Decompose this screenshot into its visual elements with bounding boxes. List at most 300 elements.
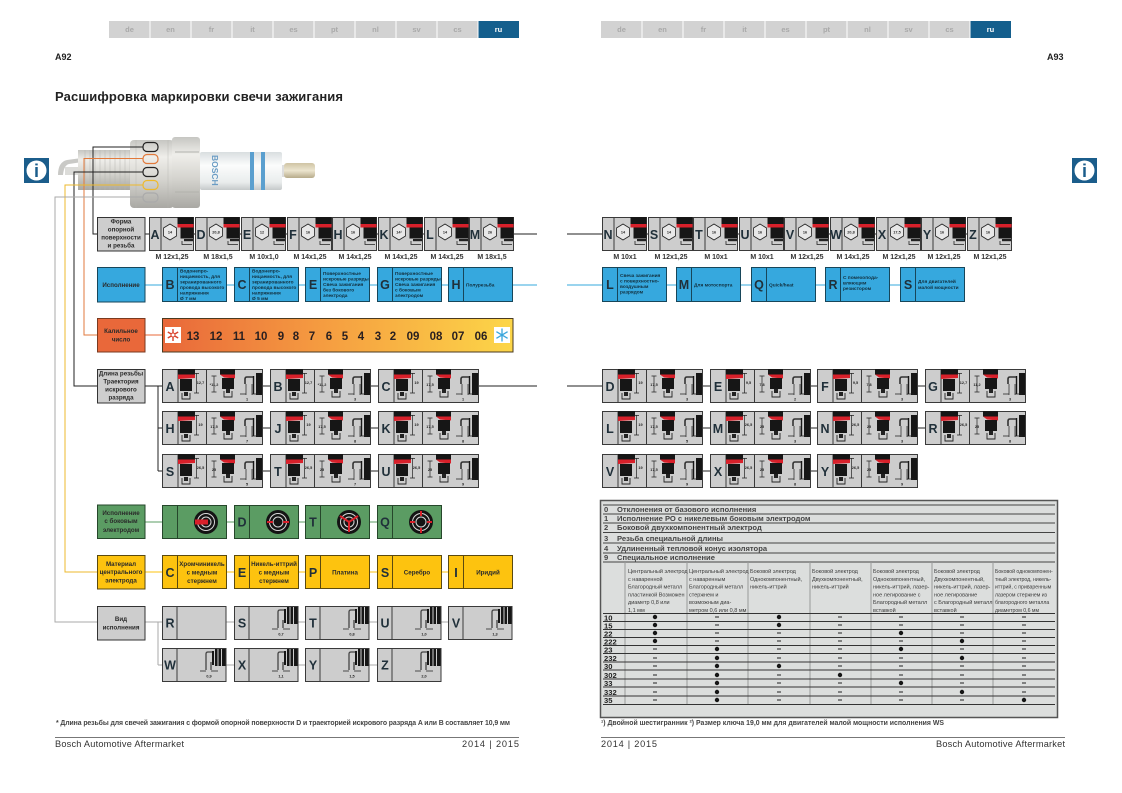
- thread length cells: right page: 26,5: [745, 423, 752, 427]
- material cells: S: [381, 566, 389, 580]
- thread length cells: right page: 11,2: [973, 383, 981, 387]
- material cells: C: [165, 566, 175, 580]
- connector lines between cells: [145, 234, 1026, 665]
- language tabs: left page: [109, 21, 519, 38]
- thread cells: left page: M: [470, 228, 480, 242]
- row 7 label: version: исполнения: [103, 624, 140, 632]
- row 4 label: thread length and spark path: Траектория: [103, 378, 139, 386]
- design cells: left page: H: [451, 278, 461, 292]
- thread length cells: right page: N: [820, 422, 830, 436]
- thread cells: left page: K: [379, 228, 389, 242]
- thread length cells: left page: T: [274, 465, 282, 479]
- column headers: метром 0,6 или 0,8 мм: [689, 608, 747, 614]
- heat range bar: 13: [187, 331, 199, 343]
- thread length cells: left page: 25: [320, 468, 324, 472]
- thread length cells: left page: 19: [306, 423, 311, 427]
- code descriptions: Удлиненный тепловой конус изолятора: [617, 544, 768, 553]
- design cells: left page: провода высокого: [252, 286, 296, 291]
- row codes: 302: [604, 671, 617, 680]
- row 4 label: thread length and spark path: искрового: [105, 386, 137, 394]
- footer left: Bosch Automotive Aftermarket: [55, 739, 184, 749]
- column headers: возможным диа-: [689, 600, 731, 606]
- thread length cells: right page: [602, 369, 1026, 488]
- thread length cells: left page: 1: [246, 398, 248, 402]
- row codes: 30: [604, 662, 612, 671]
- language tabs: left page: en: [166, 25, 175, 34]
- row codes: 10: [604, 614, 612, 622]
- thread length cells: right page: 26,5: [960, 423, 967, 427]
- design cells: left page: провода высокого: [180, 286, 224, 291]
- row codes: 23: [604, 646, 612, 654]
- thread length cells: left page: 5: [246, 482, 248, 486]
- thread length cells: left page: 25: [212, 468, 216, 472]
- design cells: right page: вляющим: [843, 282, 867, 286]
- column headers: никель-иттрий: [750, 584, 787, 591]
- column headers: иттрий, с приваренным: [995, 584, 1052, 591]
- thread cells: left page: M 14x1,25: [293, 254, 327, 261]
- thread length cells: right page: 19: [638, 381, 643, 385]
- design cells: left page: искровые разряды: [395, 278, 441, 282]
- design cells: left page: Поверхностные: [323, 271, 361, 277]
- language tabs: right page: sv: [904, 25, 913, 34]
- design cells: left page: B: [165, 278, 175, 292]
- thread length cells: left page: 7: [246, 440, 248, 444]
- column headers: Боковой электрод: [934, 568, 981, 575]
- electrode gap cells: 1,3: [492, 632, 498, 636]
- language tabs: right page: [601, 21, 1011, 38]
- thread cells: right page: S: [650, 228, 658, 242]
- thread cells: right page: M 12x1,25: [654, 254, 688, 261]
- thread length cells: left page: 19: [414, 423, 419, 427]
- thread cells: right page: Y: [923, 228, 932, 242]
- thread cells: left page: M 10x1,0: [249, 254, 279, 261]
- thread cells: right page: M 12x1,25: [973, 254, 1007, 261]
- column headers: Двухкомпонентный,: [934, 576, 985, 583]
- column headers: Благородный металл: [689, 584, 743, 591]
- thread cells: left page: L: [426, 228, 434, 242]
- row 6 label: centre electrode material: Материал: [106, 561, 136, 568]
- thread cells: right page: T: [695, 228, 703, 242]
- material cells: Серебро: [404, 570, 430, 576]
- thread length cells: left page: 1: [462, 398, 464, 402]
- thread length cells: right page: L: [606, 422, 614, 436]
- thread length cells: left page: S: [166, 465, 174, 479]
- thread length cells: right page: X: [714, 465, 723, 479]
- column headers: никель-иттрий, лазер-: [873, 584, 930, 591]
- thread cells: right page: 16: [940, 230, 944, 234]
- spark plug illustration: [58, 137, 315, 208]
- thread length cells: right page: 9: [901, 482, 903, 486]
- design cells: left page: электрода: [323, 294, 348, 299]
- heat range bar: 12: [210, 331, 222, 343]
- thread cells: right page: M 10x1: [613, 254, 637, 261]
- thread cells: right page: M 10x1: [750, 254, 774, 261]
- row 1 label: seat shape and thread: опорной: [108, 226, 134, 234]
- design cells: left page: ницаемость, для: [252, 275, 292, 280]
- design cells: right page: Для двигателей: [918, 278, 956, 285]
- electrode gap cells: X: [238, 658, 247, 672]
- design cells: right page: с поверхностно-: [620, 280, 660, 284]
- electrode gap cells: S: [238, 616, 246, 630]
- design cells: left page: Водонепро-: [252, 268, 281, 274]
- column headers: диаметром 0,6 мм: [995, 608, 1039, 614]
- design cells: left page: без бокового: [323, 286, 354, 294]
- heat range bar: 11: [233, 331, 246, 343]
- thread length cells: right page: 3: [686, 398, 688, 402]
- electrode gap cells: R: [165, 616, 175, 630]
- heat range bar: 6: [326, 331, 332, 343]
- thread cells: left page: M 14x1,25: [430, 254, 464, 261]
- thread cells: right page: 14: [621, 230, 626, 234]
- language tabs: left page: cs: [453, 25, 462, 34]
- column headers: Боковой электрод: [750, 568, 797, 575]
- language tabs: right page: ru: [987, 25, 995, 34]
- column headers: Благородный металл: [873, 599, 927, 606]
- row codes: 332: [604, 688, 617, 697]
- icon: cold snowflake: [494, 327, 510, 343]
- leader lines from plug to rows: [55, 142, 158, 622]
- column headers: 1,1 мм: [628, 608, 645, 614]
- thread length cells: right page: 2: [794, 398, 796, 402]
- thread cells: left page: 16: [306, 230, 310, 234]
- row 1 label: seat shape and thread: и резьба: [108, 242, 135, 250]
- thread cells: right page: 16: [986, 230, 990, 234]
- thread length cells: right page: 5: [686, 440, 688, 444]
- thread length cells: left page: 17,5: [210, 425, 218, 429]
- column headers: с наваренной: [628, 576, 663, 583]
- row 6 label: centre electrode material: центрального: [100, 569, 143, 576]
- thread length cells: left page: *11,2: [318, 383, 326, 387]
- row codes: 232: [604, 654, 617, 663]
- heat range bar: 9: [278, 331, 284, 343]
- row 4 label: thread length and spark path: Длина резьбы: [99, 370, 143, 378]
- column headers: Центральный электрод: [628, 568, 688, 575]
- column headers: Боковой однокомпонен-: [995, 568, 1053, 575]
- thread cells: left page: 12: [260, 230, 264, 234]
- design cells: left page: напряжения: [180, 292, 209, 296]
- design cells: left page: экранированного: [252, 280, 294, 286]
- thread length cells: right page: 17,5: [650, 425, 658, 429]
- footnote left: * Длина резьбы для свечей зажигания с формой опорной поверхности D и траекторией искрового разряда A или B составляет 10,9 мм: [56, 719, 510, 727]
- row 4 label: thread length and spark path: [98, 370, 145, 403]
- column headers: никель-иттрий, лазер-: [934, 584, 991, 591]
- icon: info right: i: [1082, 161, 1087, 181]
- thread length cells: right page: M: [713, 422, 723, 436]
- row codes: 22: [604, 630, 612, 638]
- design cells: left page: Водонепро-: [180, 268, 209, 274]
- thread cells: left page: M 18x1,5: [477, 254, 507, 261]
- thread length cells: left page: 12,7: [197, 381, 204, 385]
- design cells: right page: Свеча зажигания: [620, 273, 661, 279]
- heat range bar: 7: [309, 331, 315, 343]
- thread length cells: right page: 17,5: [650, 383, 658, 387]
- heat range bar: 09: [407, 331, 419, 343]
- side electrode cells: D: [237, 516, 247, 530]
- code descriptions: Специальное исполнение: [617, 553, 715, 562]
- footer right: Bosch Automotive Aftermarket: [936, 739, 1065, 749]
- thread length cells: left page: 3: [354, 398, 356, 402]
- code descriptions: 3: [604, 534, 608, 543]
- column headers: тный электрод, никель-: [995, 576, 1052, 583]
- row codes: 35: [604, 696, 613, 705]
- design cells: left page: E: [309, 278, 317, 292]
- language tabs: right page: it: [742, 25, 747, 34]
- thread cells: right page: 16: [758, 230, 762, 234]
- thread length cells: left page: 8: [462, 440, 464, 444]
- language tabs: right page: es: [781, 25, 790, 34]
- thread length cells: left page: 12,7: [305, 381, 312, 385]
- side electrode cells: T: [309, 516, 317, 530]
- thread cells: right page: M 12x1,25: [927, 254, 961, 261]
- dashes: not applicable: [653, 617, 1026, 700]
- thread length cells: left page: A: [165, 380, 175, 394]
- column headers: [628, 568, 1053, 614]
- design cells: left page: Полурезьба: [466, 282, 495, 288]
- design cells: right page: M: [679, 278, 689, 292]
- column headers: стержнем и: [689, 592, 718, 598]
- electrode gap cells: 1,0: [421, 632, 427, 636]
- thread length cells: left page: 8: [354, 440, 356, 444]
- row codes: [604, 614, 617, 705]
- page number A92: A92: [55, 52, 72, 62]
- language tabs: right page: cs: [945, 25, 954, 34]
- footer right: 2014 | 2015: [601, 739, 657, 749]
- row 7 label: version: Вид: [115, 616, 127, 623]
- row 5 label: side electrode: с боковым: [104, 518, 138, 525]
- thread length cells: left page: 9: [462, 482, 464, 486]
- thread length cells: right page: 3: [901, 440, 903, 444]
- material cells: Иридий: [476, 570, 500, 576]
- thread length cells: right page: 12,7: [960, 381, 967, 385]
- dots: applicable combinations: [653, 615, 1026, 702]
- thread length cells: right page: E: [714, 380, 722, 394]
- row 6 label: centre electrode material: [98, 556, 145, 589]
- language tabs: left page: pt: [331, 25, 339, 34]
- electrode gap cells: 0,9: [206, 674, 212, 678]
- footer left: [55, 738, 519, 749]
- thread length cells: left page: 17,5: [426, 383, 434, 387]
- thread cells: left page: 16: [351, 230, 355, 234]
- thread length cells: left page: J: [275, 422, 282, 436]
- thread cells: left page: M 14x1,25: [384, 254, 418, 261]
- electrode gap cells: 0,7: [278, 632, 284, 636]
- column headers: ное легирование с: [873, 592, 921, 598]
- row 3 label: heat range: [98, 318, 145, 352]
- code descriptions: 0: [604, 505, 608, 514]
- thread cells: right page: M 12x1,25: [882, 254, 916, 261]
- thread cells: left page: 14: [168, 230, 173, 234]
- material cells: E: [238, 566, 246, 580]
- heat range bar: 2: [390, 331, 396, 343]
- thread cells: left page: F: [289, 228, 297, 242]
- design cells: left page: напряжения: [252, 292, 281, 296]
- icon: hot star: [165, 327, 181, 343]
- thread length cells: right page: 3: [794, 440, 796, 444]
- thread length cells: right page: 9,5: [853, 381, 858, 385]
- column headers: вставкой: [873, 607, 896, 614]
- thread length cells: left page: K: [381, 422, 391, 436]
- thread cells: right page: Z: [969, 228, 977, 242]
- design cells: left page: электродом: [395, 294, 424, 299]
- thread length cells: right page: 25: [867, 425, 871, 429]
- language tabs: left page: it: [250, 25, 255, 34]
- thread length cells: right page: G: [928, 380, 938, 394]
- footnote right: ¹) Двойной шестигранник ²) Размер ключа 19,0 мм для двигателей малой мощности исполнения WS: [601, 719, 944, 727]
- design cells: right page: R: [828, 278, 838, 292]
- row 4 label: thread length and spark path: разряда: [108, 394, 134, 402]
- thread cells: right page: M 12x1,25: [790, 254, 824, 261]
- thread cells: left page: M 18x1,5: [203, 254, 233, 261]
- thread length cells: right page: 3: [1009, 398, 1011, 402]
- material cells: Платина: [332, 570, 358, 576]
- icon: info left: [24, 158, 49, 183]
- electrode gap cells: W: [164, 658, 176, 672]
- thread cells: right page: 20,8: [847, 230, 855, 234]
- thread cells: left page: E: [243, 228, 251, 242]
- design cells: left page: ницаемость, для: [180, 275, 220, 280]
- electrode gap cells: [162, 606, 512, 682]
- thread length cells: right page: 25: [760, 425, 764, 429]
- column headers: никель-иттрий: [812, 584, 849, 591]
- heat range bar: 08: [430, 331, 443, 343]
- code descriptions: 9: [604, 553, 608, 562]
- design cells: right page: Quick/heat: [769, 282, 794, 288]
- thread cells: left page: D: [196, 228, 206, 242]
- code descriptions: 1: [604, 514, 609, 523]
- electrode gap cells: 1,5: [349, 674, 355, 678]
- thread length cells: right page: 8: [1009, 440, 1011, 444]
- thread length cells: left page: U: [381, 465, 391, 479]
- design cells: left page: C: [237, 278, 247, 292]
- code descriptions: 4: [604, 544, 609, 553]
- language tabs: left page: de: [125, 25, 134, 34]
- thread cells: left page: [150, 217, 514, 261]
- footer left: 2014 | 2015: [462, 739, 519, 749]
- heat range bar: 4: [358, 331, 365, 343]
- heat range bar: 06: [475, 331, 487, 343]
- thread cells: right page: M 14x1,25: [836, 254, 870, 261]
- thread length cells: right page: 17,5: [650, 468, 658, 472]
- thread length cells: left page: 25: [428, 468, 432, 472]
- row 1 label: seat shape and thread: [98, 218, 145, 251]
- language tabs: left page: fr: [209, 25, 214, 34]
- material cells: стержнем: [259, 578, 289, 585]
- design cells: right page: С помехопода-: [843, 275, 879, 281]
- thread length cells: right page: 9,5: [746, 381, 751, 385]
- thread length cells: right page: 25: [975, 425, 979, 429]
- thread cells: left page: 14¹: [396, 230, 402, 234]
- language tabs: left page: nl: [372, 25, 379, 34]
- code descriptions: Исполнение РО с никелевым боковым электродом: [617, 514, 811, 523]
- design cells: right page: воздушным: [620, 285, 649, 290]
- thread length cells: left page: 26,5: [305, 466, 312, 470]
- thread length cells: left page: H: [165, 422, 175, 436]
- thread length cells: left page: 26,5: [197, 466, 204, 470]
- language tabs: right page: en: [658, 25, 667, 34]
- material cells: с медным: [259, 570, 290, 576]
- heat range bar: [162, 318, 513, 352]
- design cells: right page: резистором: [843, 287, 872, 292]
- heat range bar: 07: [452, 331, 464, 343]
- thread length cells: left page: B: [273, 380, 283, 394]
- electrode gap cells: Z: [381, 658, 389, 672]
- thread cells: right page: [602, 217, 1012, 261]
- thread length cells: right page: 3: [901, 398, 903, 402]
- thread length cells: right page: D: [605, 380, 615, 394]
- row 5 label: side electrode: электродом: [103, 527, 140, 534]
- electrode gap cells: T: [309, 616, 317, 630]
- code descriptions: Резьба специальной длины: [617, 534, 723, 543]
- icon: info right: [1072, 158, 1097, 183]
- design cells: left page: искровые разряды: [323, 278, 369, 282]
- thread length cells: left page: 7: [354, 482, 356, 486]
- thread cells: right page: 16: [803, 230, 807, 234]
- thread length cells: left page: 19: [414, 381, 419, 385]
- column headers: с Благородный металл: [934, 599, 992, 606]
- design cells: left page: Свеча зажигания: [323, 282, 364, 288]
- thread length cells: right page: 9: [686, 482, 688, 486]
- design cells: right page: L: [606, 278, 614, 292]
- design cells: right page: Для мотоспорта: [694, 282, 733, 288]
- code descriptions: Боковой двухкомпонентный электрод: [617, 523, 762, 532]
- design cells: left page: Поверхностные: [395, 271, 433, 277]
- code descriptions: Отклонения от базового исполнения: [617, 505, 756, 514]
- title: Расшифровка маркировки свечи зажигания: [55, 89, 343, 104]
- thread length cells: left page: [162, 369, 478, 488]
- column headers: ное легирование: [934, 592, 977, 598]
- row 2 label: design: [98, 268, 145, 302]
- thread cells: right page: U: [740, 228, 750, 242]
- heat range bar: 5: [342, 331, 349, 343]
- thread length cells: left page: 19: [198, 423, 203, 427]
- design cells: right page: малой мощности: [918, 284, 959, 291]
- design cells: right page: [602, 267, 964, 302]
- thread length cells: right page: 25: [867, 468, 871, 472]
- electrode gap cells: V: [452, 616, 461, 630]
- thread length cells: right page: 26,5: [852, 423, 859, 427]
- language tabs: right page: fr: [701, 25, 706, 34]
- thread cells: left page: M 12x1,25: [155, 254, 189, 261]
- material cells: P: [309, 566, 317, 580]
- row 6 label: centre electrode material: электрода: [105, 578, 137, 584]
- material cells: Никель-иттрий: [251, 561, 297, 568]
- design cells: left page: экранированного: [180, 280, 222, 286]
- thread length cells: right page: 19: [638, 423, 643, 427]
- column headers: Боковой электрод: [812, 568, 859, 575]
- side electrode cells: Q: [380, 516, 390, 530]
- thread length cells: right page: 7,8: [866, 383, 872, 387]
- thread cells: right page: 16: [712, 230, 716, 234]
- material cells: [162, 555, 512, 589]
- row 5 label: side electrode: [98, 505, 145, 538]
- side electrode cells: [162, 505, 442, 539]
- code descriptions: 2: [604, 523, 608, 532]
- thread length cells: right page: V: [606, 465, 615, 479]
- row codes: 15: [604, 622, 613, 630]
- heat range bar: 3: [375, 331, 381, 343]
- design cells: right page: разрядом: [620, 290, 644, 296]
- language tabs: right page: de: [617, 25, 626, 34]
- design cells: left page: [162, 267, 512, 302]
- column headers: с наваренным: [689, 577, 725, 583]
- column headers: вставкой: [934, 607, 957, 614]
- footer right: [601, 738, 1065, 749]
- column headers: Двухкомпонентный,: [812, 576, 863, 583]
- thread length cells: right page: R: [928, 422, 938, 436]
- thread length cells: left page: 17,5: [426, 425, 434, 429]
- heat range bar: 10: [255, 331, 267, 343]
- material cells: стержнем: [187, 578, 217, 585]
